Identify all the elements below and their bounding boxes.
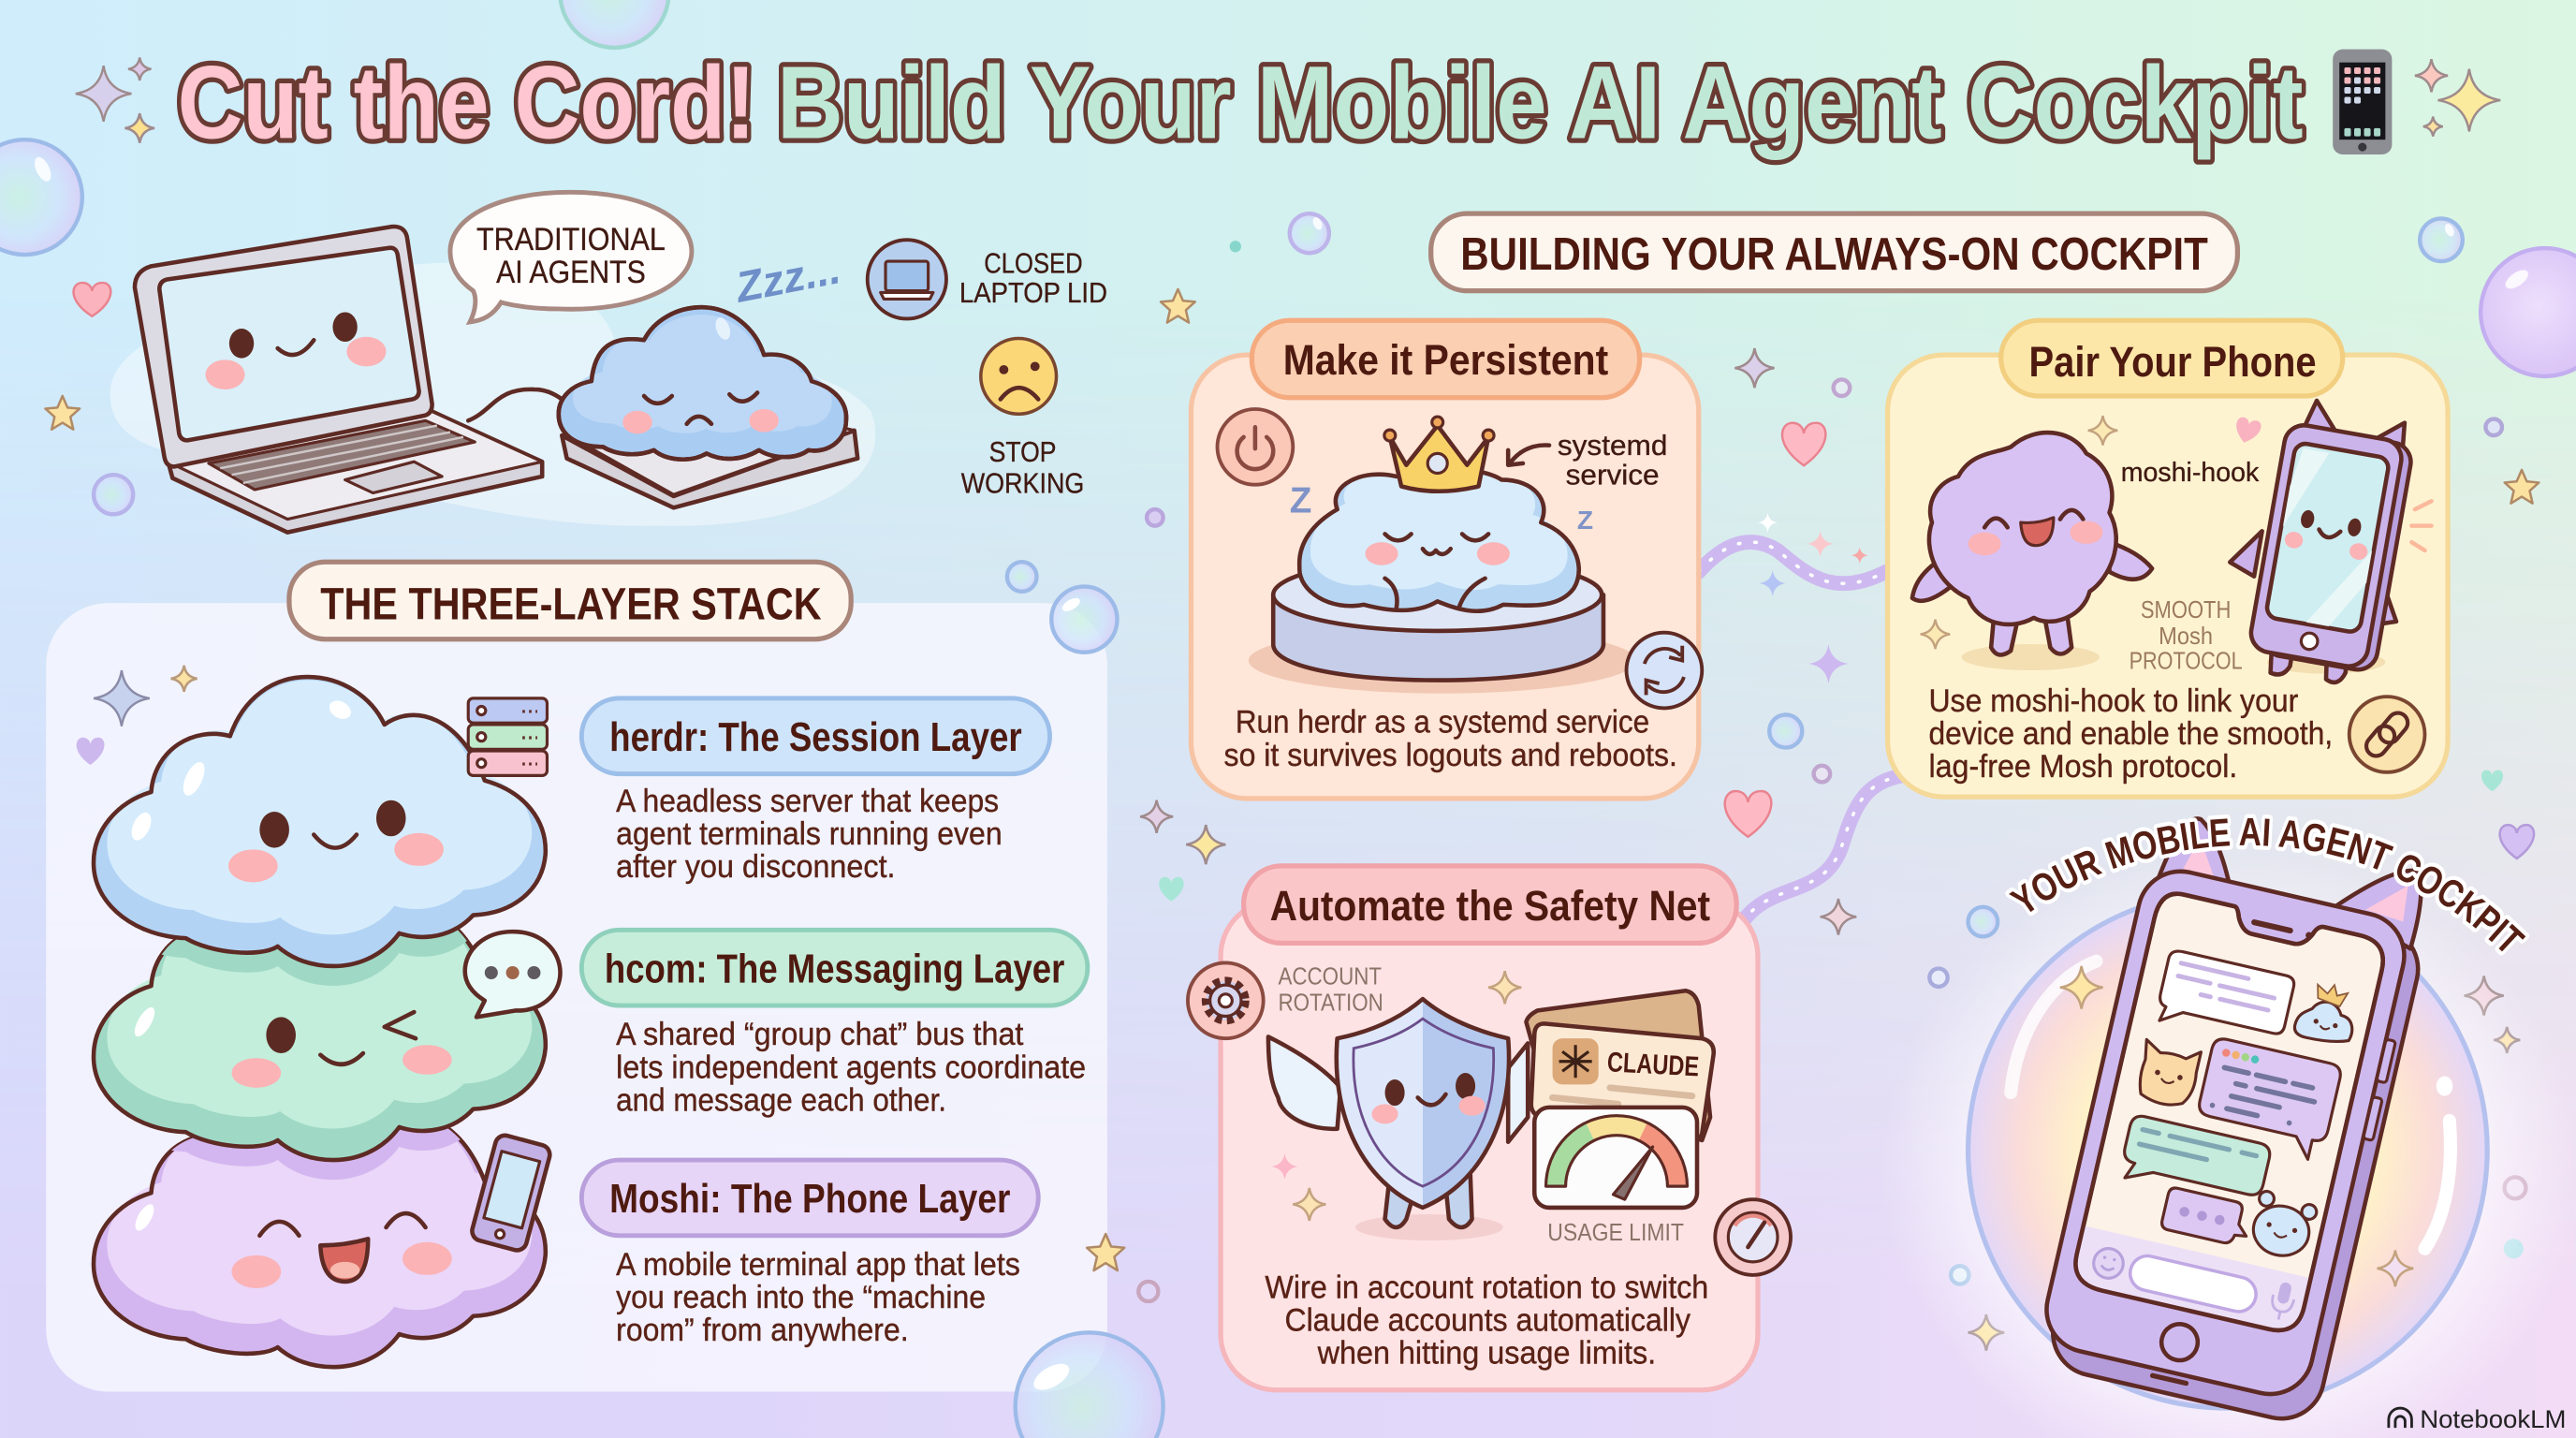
- illustration: traditional AI agents sleeping with a closed laptop: [110, 227, 875, 533]
- title: [178, 45, 2304, 160]
- panel: pair your phone: [1888, 320, 2448, 797]
- label: smooth mosh protocol: [2130, 597, 2243, 674]
- curved title: YOUR MOBILE AI AGENT COCKPIT: [2005, 814, 2529, 955]
- sleeping cloud with crown: [1299, 468, 1579, 611]
- blue cloud: [94, 677, 546, 966]
- panel: automate the safety net: [1188, 866, 1791, 1390]
- pill heading: [1244, 866, 1736, 943]
- connector: ribbon between persistent and pair cards: [1699, 542, 1886, 583]
- panel: make it persistent: [1191, 320, 1702, 799]
- sleep letters: Z: [1577, 506, 1593, 535]
- typing bubble: [2160, 1186, 2253, 1247]
- pill: herdr: herdr: The Session Layer: [609, 714, 1022, 760]
- label: systemd service: service: [1566, 459, 1660, 492]
- label: closed laptop lid: LAPTOP LID: [959, 276, 1107, 309]
- cat avatar: [2133, 1039, 2202, 1110]
- big bubble: [1969, 892, 2487, 1408]
- claude cards: CLAUDE: [1606, 1047, 1700, 1082]
- heading: three-layer stack: THE THREE-LAYER STACK: [320, 580, 822, 630]
- text: hcom description: lets independent agents coordinate: [616, 1049, 1086, 1085]
- icon: gear: [1188, 962, 1264, 1038]
- phone front: [2038, 863, 2413, 1402]
- green cloud: [94, 871, 546, 1160]
- input field: [2127, 1253, 2260, 1315]
- microphone: [2268, 1281, 2297, 1322]
- text: safety net description: Claude accounts automatically: [1284, 1303, 1691, 1339]
- label: stop working: STOP: [989, 435, 1057, 468]
- pill heading: [1251, 320, 1640, 398]
- text: moshi description: [616, 1247, 1020, 1348]
- label: moshi-hook: moshi-hook: [2121, 458, 2260, 488]
- white blob behind laptop: [110, 263, 875, 526]
- icon: power: [1218, 409, 1293, 485]
- shadow of green cloud on purple: [171, 1129, 461, 1180]
- icon: phone emoji in title: [2333, 50, 2392, 154]
- text: safety net description: [1265, 1269, 1708, 1372]
- shield character with wings: [1268, 999, 1528, 1240]
- text: safety net description: Wire in account rotation to switch: [1265, 1269, 1708, 1305]
- label: closed laptop lid: CLOSED: [984, 246, 1083, 279]
- text: persistent description: Run herdr as a systemd service: [1236, 705, 1649, 741]
- text: persistent description: [1224, 705, 1677, 773]
- text: persistent description: so it survives logouts and reboots.: [1224, 738, 1677, 773]
- phone: [2033, 810, 2441, 1427]
- sparkles and heart in panel: [77, 666, 198, 765]
- pill heading: [2001, 320, 2343, 396]
- green chat bubble: [2118, 1114, 2272, 1209]
- label: smooth mosh protocol: PROTOCOL: [2130, 648, 2243, 674]
- text: moshi description: room” from anywhere.: [616, 1313, 909, 1348]
- title: Cut the Cord!: [178, 45, 755, 160]
- cat ears: [2154, 813, 2429, 948]
- text: hcom description: and message each other.: [616, 1082, 946, 1118]
- closed laptop: [562, 431, 857, 507]
- title: Build Your Mobile AI Agent Cockpit: [777, 45, 2304, 160]
- text: herdr description: after you disconnect.: [616, 849, 896, 885]
- side buttons: [2377, 1039, 2395, 1083]
- label: account rotation: ROTATION: [1278, 988, 1383, 1016]
- speaker: [2251, 918, 2293, 934]
- text: pair description: lag-free Mosh protocol.: [1928, 749, 2237, 785]
- label: smooth mosh protocol: Mosh: [2159, 624, 2213, 650]
- icon: speedometer: [1715, 1199, 1791, 1275]
- pill: hcom: [581, 930, 1088, 1005]
- bear avatar: [2247, 1190, 2319, 1262]
- sparkles around the phone: [2060, 966, 2413, 1286]
- laptop open with face: [135, 227, 542, 533]
- crown: [1384, 417, 1494, 492]
- home button: [2158, 1321, 2202, 1364]
- green face: [131, 1005, 452, 1088]
- text: pair description: Use moshi-hook to link your: [1928, 683, 2298, 719]
- icon: chain link: [2349, 697, 2424, 772]
- sparkles and heart: [1921, 416, 2262, 649]
- code bubble: [2192, 1036, 2343, 1162]
- cloud avatar with crown: [2292, 978, 2362, 1048]
- text: hcom description: A shared “group chat” bus that: [616, 1017, 1024, 1052]
- heading: building your always-on cockpit: [1431, 213, 2237, 291]
- label: account rotation: [1278, 961, 1383, 1016]
- connector: ribbon from safety net to pair card: [1741, 775, 1902, 923]
- bubbles overlapping the stack panel: [1007, 562, 1164, 1438]
- label: account rotation: ACCOUNT: [1278, 961, 1382, 990]
- purple cloud: [94, 1078, 546, 1367]
- sleep letters: Z: [1290, 481, 1311, 521]
- white chat bubble: [2155, 949, 2296, 1049]
- purple face: [132, 1201, 452, 1288]
- text: moshi description: you reach into the “machine: [616, 1280, 986, 1315]
- label: smooth mosh protocol: SMOOTH: [2141, 597, 2231, 624]
- pill: moshi: Moshi: The Phone Layer: [609, 1176, 1010, 1222]
- cloud stack: [94, 677, 561, 1367]
- speech bubble: traditional AI agents: AI AGENTS: [496, 255, 646, 290]
- icon: sad face: [981, 339, 1057, 414]
- sleep letters: Zzz...: [730, 244, 844, 312]
- emoji button: [2091, 1246, 2126, 1281]
- pill: moshi: [581, 1160, 1038, 1236]
- text: herdr description: agent terminals running even: [616, 816, 1003, 852]
- pill: hcom: hcom: The Messaging Layer: [605, 946, 1064, 992]
- sleep letters: [1290, 481, 1593, 535]
- motion ticks: [2411, 501, 2431, 550]
- speech bubble: traditional AI agents: [450, 192, 692, 322]
- text: pair description: [1928, 683, 2333, 785]
- pill: herdr: [581, 698, 1050, 774]
- phone back layer: [2044, 875, 2426, 1427]
- NotebookLM mark: NotebookLM: [2420, 1404, 2566, 1433]
- label: usage limit: USAGE LIMIT: [1547, 1218, 1684, 1246]
- label: stop working: WORKING: [961, 467, 1084, 500]
- icon: refresh: [1627, 633, 1702, 708]
- heading: three-layer stack: [289, 562, 851, 639]
- purple blob character: [1912, 433, 2152, 670]
- speech bubble: traditional AI agents: TRADITIONAL: [476, 222, 666, 257]
- claude cards: [1526, 990, 1714, 1142]
- illustration: your mobile AI agent cockpit: [1922, 814, 2537, 1438]
- icon: closed laptop lid: [868, 240, 946, 318]
- soft halo: [1878, 849, 2576, 1438]
- text: hcom description: [616, 1017, 1086, 1118]
- text: herdr description: A headless server that keeps: [616, 784, 999, 819]
- heading: building your always-on cockpit: BUILDING YOUR ALWAYS-ON COCKPIT: [1460, 229, 2208, 280]
- icon: phone: [470, 1133, 552, 1253]
- pedestal: [1249, 559, 1636, 694]
- phone character: [2212, 390, 2432, 694]
- pill heading: Make it Persistent: [1283, 336, 1608, 384]
- label: closed laptop lid: [959, 246, 1107, 309]
- usage gauge card: [1534, 1108, 1697, 1208]
- sleeping cloud: [559, 307, 846, 460]
- icon: chat bubble: [465, 932, 561, 1017]
- text: pair description: device and enable the smooth,: [1928, 716, 2333, 752]
- panel: three-layer stack: [46, 603, 1107, 1392]
- pill heading: Automate the Safety Net: [1270, 882, 1710, 930]
- label: systemd service: systemd: [1558, 429, 1667, 462]
- shadow of blue cloud on green: [161, 931, 467, 986]
- icon: server: [468, 698, 547, 775]
- screen: [2071, 889, 2389, 1336]
- text: safety net description: when hitting usage limits.: [1317, 1336, 1656, 1372]
- cable: [468, 389, 562, 420]
- text: moshi description: A mobile terminal app that lets: [616, 1247, 1020, 1283]
- pill heading: Pair Your Phone: [2029, 338, 2317, 386]
- label: stop working: [961, 435, 1084, 500]
- small sparkles: [1271, 971, 1521, 1221]
- label: systemd service: [1508, 429, 1667, 492]
- text: herdr description: [616, 784, 1003, 885]
